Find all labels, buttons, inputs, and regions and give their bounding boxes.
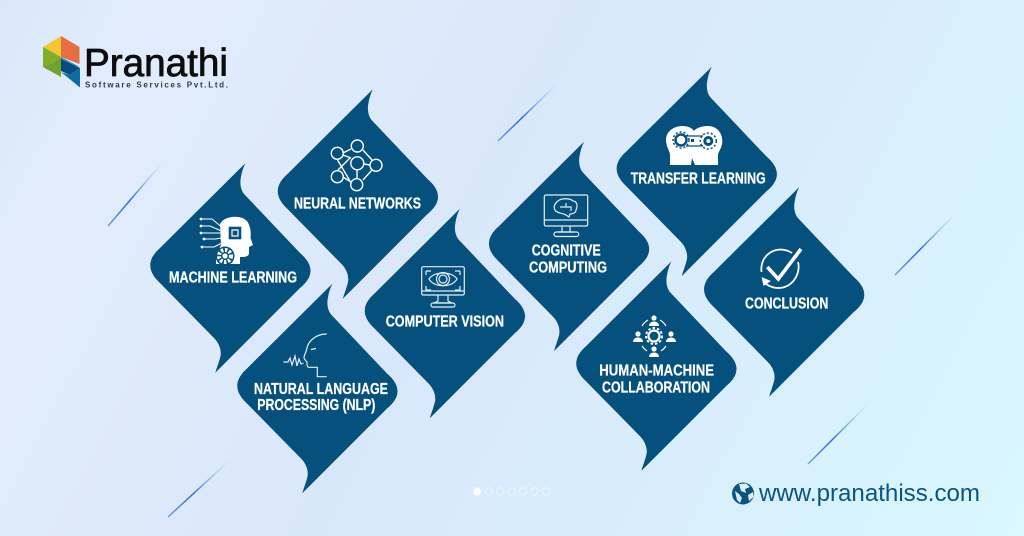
icon: neural network [331,140,382,191]
icon: AI head with chip and gear [200,217,253,266]
label: HUMAN-MACHINE [599,362,714,379]
label: MACHINE LEARNING [169,270,297,287]
accent streak [168,460,230,517]
icon: globe [732,482,756,504]
icon: check mark in circular arrow [761,249,801,288]
accent streak [108,163,162,226]
accent streak [498,83,558,141]
panel shape [237,284,398,493]
panel shape [489,142,649,351]
accent streak [895,212,957,275]
label: NATURAL LANGUAGE [254,381,388,398]
url text: www.pranathiss.com [758,480,980,507]
panel: cognitive computing [489,142,649,351]
logo [43,36,228,90]
label: NEURAL NETWORKS [294,195,421,212]
panel: neural networks [278,89,438,299]
panel: transfer learning [617,67,777,276]
label: CONCLUSION [745,295,828,312]
label [529,243,607,276]
pagination dots [473,488,550,495]
panel shape [617,67,777,276]
label: COMPUTER VISION [386,314,504,331]
label [599,362,714,397]
panel: conclusion [704,187,864,397]
panel shape [150,163,310,373]
icon: speaking head [284,334,327,377]
logo tagline: Software Services Pvt.Ltd. [85,80,228,90]
icon: people around gear [633,315,676,357]
panel: machine learning [150,163,310,373]
panel shape [365,209,525,418]
label: COMPUTING [529,259,607,276]
label: COLLABORATION [602,380,710,397]
panel: computer vision [365,209,525,418]
icon: monitor with brain [544,195,588,236]
label: TRANSFER LEARNING [631,170,766,187]
panel shape [278,89,438,299]
website link [732,480,980,507]
label: PROCESSING (NLP) [257,397,375,414]
panel: natural language processing [237,284,398,493]
panel shape [704,187,864,397]
panel: human-machine collaboration [576,262,736,471]
logo mark [43,36,80,88]
accent streak [808,403,869,464]
icon: two heads with gears [666,126,722,165]
panel shape [576,262,736,471]
label [254,381,388,414]
icon: monitor with eye [422,267,464,307]
label: COGNITIVE [532,243,601,260]
logo name: Pranathi [84,42,228,85]
